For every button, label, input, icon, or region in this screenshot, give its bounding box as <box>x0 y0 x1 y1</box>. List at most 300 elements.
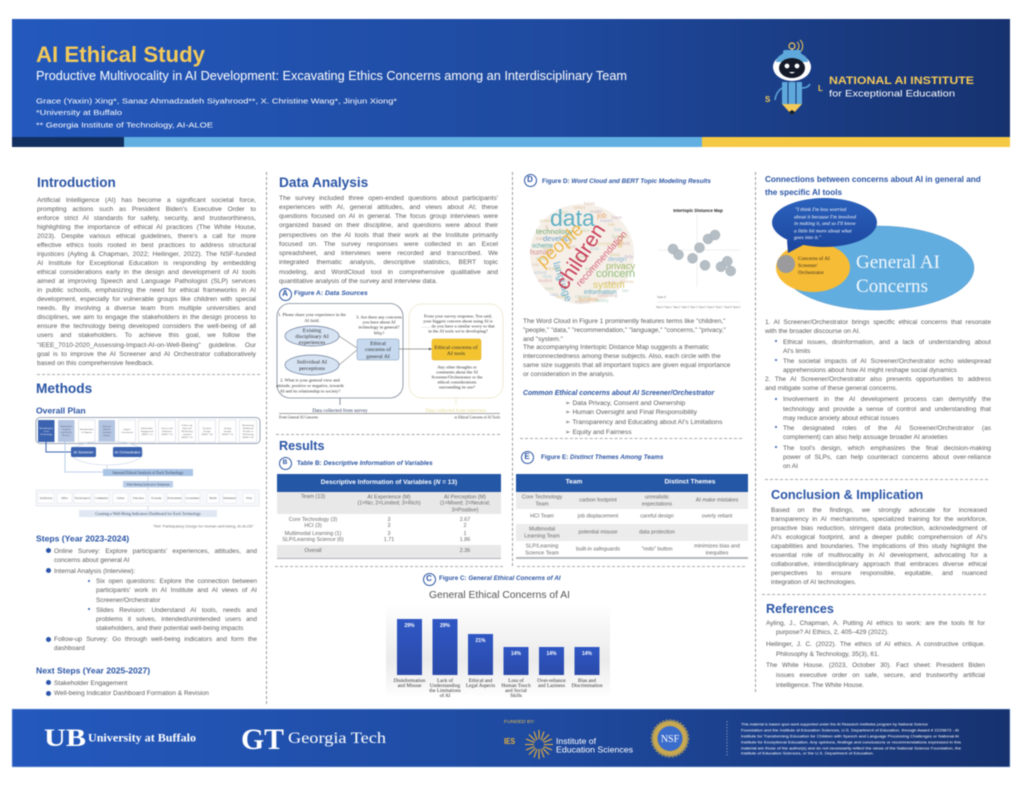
ellipse: disciplinary experiences: Existing <box>303 328 322 334</box>
logo: IES: IES <box>504 737 516 746</box>
well-being domains row: Culture <box>116 497 125 500</box>
diagram: nested concerns ellipses with speech bubble: Orchestrator <box>798 270 824 276</box>
table E: distinct themes: HCI Team <box>530 513 554 519</box>
diagram: figure A data sources: AI and its relationship to society? <box>280 388 340 394</box>
diagram: overall plan flowchart: Analysis <box>62 428 71 431</box>
AI Orchestrator button <box>113 447 142 457</box>
caption: overall plan reference: "Ref: Participatory Design for Human well-being, AI-ALOE" <box>153 524 254 528</box>
list: steps: participants' work in AI Institute and AI views of AI <box>96 587 257 594</box>
chart: intertopic distance map <box>656 208 740 309</box>
chart: word cloud: develop <box>543 234 569 243</box>
text: word cloud explanation <box>522 318 731 378</box>
text: data analysis paragraph: integrated thematic analysis, descriptive statistics, BERT topic <box>279 259 498 266</box>
list: next steps: Stakeholder Engagement <box>54 680 127 686</box>
bar labels <box>394 677 603 699</box>
table B: descriptive information: 1.86 <box>460 537 470 543</box>
logo: University at Buffalo: UB <box>44 725 86 752</box>
text: numbered findings <box>764 318 992 470</box>
ellipse: individual perceptions <box>285 355 339 375</box>
authors and affiliations: Grace (Yaxin) Xing*, Sanaz Ahmadzadeh Siyahrood**, X. Christine Wang*, Jinjun Xiong* <box>36 96 397 106</box>
table E: distinct themes: Team <box>535 501 549 507</box>
text: numbered findings: may reduce anxiety about ethical issues <box>783 415 899 422</box>
list: steps: Screener/Orchestrator <box>96 597 160 604</box>
list: common concerns: ➢ Transparency and Educating about AI's Limitations <box>565 419 722 426</box>
map title: Intertopic Distance Map <box>673 208 723 213</box>
bar values: 14% <box>511 651 522 657</box>
diagram: overall plan flowchart: Well-being <box>242 433 254 436</box>
internal analysis bar <box>103 469 193 476</box>
logo: Georgia Tech: GT <box>241 723 284 756</box>
well-being domains row <box>36 490 259 506</box>
bar labels: Bias and <box>578 678 596 684</box>
pastel background words: law <box>622 288 629 293</box>
box: general concerns: general AI <box>366 354 390 360</box>
table E: distinct themes: minimizes bias and <box>694 543 740 549</box>
diagram: overall plan flowchart: Technology <box>40 433 53 436</box>
diagram: figure A data sources: attitude, positive or negative, towards <box>276 383 344 389</box>
text: introduction paragraph: Artificial Intelligence (AI) has become a significant societal force, <box>37 196 256 204</box>
diagram: overall plan flowchart: Internal <box>103 425 111 428</box>
diagram: overall plan flowchart: Identification <box>80 428 94 431</box>
dashboard bar: Creating a Well-Being Indicators Dashboard for Each Technology <box>95 511 201 516</box>
text: introduction paragraph: disciplines, we aim to engage the stakeholders in the design process to <box>37 314 256 321</box>
diagram: overall plan flowchart: (IEEE 7.4) <box>202 433 213 436</box>
diagram: nested concerns ellipses with speech bubble: Concerns of AI <box>798 255 830 262</box>
text: data analysis paragraph: focused on. The survey responses were collected in an Excel <box>279 241 498 248</box>
diagram: figure A data sources: your biggest concern about using AI is <box>423 318 493 324</box>
text: introduction paragraph: in public schools, emphasizing the need for ethical frameworks in AI <box>37 287 256 294</box>
bar values: 14% <box>582 651 593 657</box>
funding disclaimer: Institute for Exceptional Education. Any opinions, findings and conclusions or recommendations expressed in this <box>741 740 961 744</box>
heading: connections <box>764 175 981 198</box>
heading: connections: Connections between concerns about AI in general and <box>765 175 981 184</box>
logo: IES: Education Sciences <box>556 746 633 754</box>
diagram: nested concerns ellipses with speech bubble: Concerns <box>856 276 928 297</box>
subheading: Overall Plan: Overall Plan <box>36 406 86 416</box>
logo: University at Buffalo: University at Buffalo <box>88 730 196 744</box>
well-being domains row: Psychological <box>75 497 90 500</box>
pastel background words: use <box>570 236 578 241</box>
table E: distinct themes: Multimodal <box>529 526 555 532</box>
list: steps: dashboard <box>54 645 85 652</box>
text: data analysis paragraph: organized based on their discipline, and questions were about their <box>279 222 498 229</box>
text: introduction paragraph: "IEEE_7010-2020_Assessing-Impact-AI-on-Well-Being" guideline. Our <box>37 342 256 348</box>
list: steps: concerns about general AI <box>54 557 130 564</box>
topic circles <box>668 230 736 276</box>
table B: descriptive information: 2 <box>464 523 466 529</box>
list: common concerns: ➢ Human Oversight and Final Responsibility <box>565 409 697 416</box>
pastel background words: think <box>543 274 553 279</box>
pastel background words: equity <box>605 280 617 285</box>
text: numbered findings: apprehensions about how AI might reshape social dynamics <box>783 367 957 374</box>
text: references list <box>766 620 986 690</box>
authors and affiliations <box>36 96 397 130</box>
text: data analysis paragraph: modeling, and WordCloud tool in comprehensive qualitative and <box>279 268 498 276</box>
well-being domains row: Work <box>246 497 253 500</box>
table B: descriptive information: 2.36 <box>460 548 470 554</box>
AI Orchestrator button: AI Orchestrator <box>115 450 141 454</box>
badge A <box>278 288 292 300</box>
pastel background words: teacher <box>548 266 563 271</box>
indicator template bar: Well-Being Indicator Template <box>126 483 170 487</box>
icon: robot pencil mascot: S <box>765 95 771 104</box>
text: references list: Philosophy & Technology, 35(3), 61. <box>776 651 879 658</box>
subheading: Steps: Steps (Year 2023-2024) <box>36 534 129 544</box>
tool concerns ellipse <box>776 243 850 292</box>
diagram: overall plan flowchart: Dashboard <box>243 427 254 430</box>
text: introduction paragraph: enforce strict AI standards for safety, security, and trustworthiness, <box>37 215 256 222</box>
table B label: Table B: Descriptive Information of Variables <box>297 460 433 467</box>
diagram: overall plan flowchart: Survey and <box>161 427 173 430</box>
funded by label: FUNDED BY: <box>504 719 535 724</box>
table B: descriptive information: 3=Positive) <box>452 507 478 513</box>
topic slider <box>656 295 740 309</box>
bar labels: and Misuse <box>398 683 422 689</box>
speech bubble: about it because I'm involved <box>794 214 856 220</box>
diagram: overall plan flowchart: and Needs <box>61 431 71 434</box>
heading: Results: Results <box>279 439 324 453</box>
text: conclusion paragraph: collaborative, interdisciplinary approach that embraces diverse ethical <box>771 561 987 568</box>
box: AI tool concerns: Ethical concerns of <box>434 344 478 351</box>
speech bubble: goes into it." <box>794 235 822 241</box>
diagram: nested concerns ellipses with speech bubble <box>771 197 975 311</box>
well-being domains row: Affect <box>61 497 68 500</box>
table B: descriptive information: 3 <box>388 523 390 529</box>
text: numbered findings: complement) can also help assuage broader AI anxieties <box>783 434 948 441</box>
chart: word cloud: slp <box>617 239 624 248</box>
chart: word cloud: information <box>584 289 617 296</box>
logo text <box>829 75 974 100</box>
text: numbered findings: technology and provide a sense of control and understanding that <box>783 406 991 412</box>
text: introduction paragraph: effective ethics tools rooted in best practices to address structural <box>37 242 256 249</box>
table B: descriptive information: 1 <box>464 531 466 537</box>
diagram: overall plan flowchart: Review <box>62 434 70 437</box>
bar labels: Lack of <box>437 677 453 684</box>
pastel background words: tool <box>560 210 567 215</box>
diagram: overall plan flowchart: Ethical <box>103 428 111 431</box>
chart: word cloud: privacy <box>606 261 636 271</box>
diagram: overall plan flowchart: Indicators <box>162 430 172 433</box>
diagram: figure A data sources: technology in general? <box>359 324 399 330</box>
bar values: 14% <box>546 651 557 657</box>
text: references list: purpose? AI Ethics, 2, 405–429 (2022). <box>776 629 889 636</box>
pastel background words: risk <box>608 222 616 227</box>
pastel background words: ownership <box>598 293 618 298</box>
pastel background words: tools <box>590 246 599 251</box>
logo: Georgia Tech: Georgia Tech <box>288 730 386 747</box>
heading: Introduction: Introduction <box>37 175 116 190</box>
text: numbered findings: 2. The AI Screener/Orchestrator also presents opportunities to address <box>765 376 991 383</box>
pastel background words: help <box>625 254 634 259</box>
logo: IES: Institute of <box>556 737 597 746</box>
diagram: figure A data sources: AI field. <box>304 318 320 323</box>
diagram: overall plan flowchart <box>35 416 261 518</box>
diagram: overall plan flowchart: (IEEE 7.5) <box>222 433 233 436</box>
table B: descriptive information <box>276 473 502 560</box>
ellipse: disciplinary experiences: experiences <box>299 340 325 346</box>
bar labels: Human Touch <box>501 683 531 689</box>
diagram: overall plan flowchart: of Impacts <box>81 431 92 434</box>
diagram: overall plan flowchart: Testing <box>224 427 232 430</box>
text: introduction paragraph: users and stakeholders. To achieve this goal, we follow the <box>37 332 256 339</box>
ellipse: individual perceptions: perceptions <box>299 366 325 372</box>
survey box <box>277 304 403 398</box>
diagram: figure A data sources: 2. What is your general view and <box>280 378 341 382</box>
text: word cloud explanation: same size suggests that all important topics are given equal importance <box>523 362 730 369</box>
pastel background words: ethics <box>574 205 585 210</box>
box: general concerns: Ethical <box>370 341 386 347</box>
chart: word cloud: scheme <box>532 244 554 250</box>
funding disclaimer: This material is based upon work supported under the AI Research Institutes program by National Science <box>741 722 928 726</box>
diagram: overall plan flowchart: Stakeholder <box>60 425 72 428</box>
table E: distinct themes: "redo" button <box>641 547 673 553</box>
list: steps: stakeholders, and their potential well-being impacts <box>96 625 243 632</box>
pastel background words: ai <box>545 224 548 229</box>
diagram: overall plan flowchart: Well-being <box>181 430 193 433</box>
diagram: overall plan flowchart: Follow-up <box>182 424 193 427</box>
well-being domains row: Settlements <box>223 497 236 500</box>
pastel background words: speech <box>616 241 630 246</box>
pastel background words: future <box>584 201 596 206</box>
pastel background words: fair <box>562 218 569 223</box>
text: conclusion paragraph: transparency in AI mechanisms, specialized training for the workforce, <box>771 516 987 523</box>
badge E: E <box>524 452 530 460</box>
bar labels: and Social <box>505 688 527 694</box>
diagram: overall plan flowchart: Identification <box>39 427 54 430</box>
text: conclusion paragraph <box>770 506 988 586</box>
diagram: overall plan flowchart: Design <box>224 430 232 433</box>
pastel background words: issue <box>610 252 621 257</box>
diagram: figure A data sources: Screener/Orchestrator or the <box>432 374 482 380</box>
chart: word cloud: concern <box>596 268 635 280</box>
ellipse: individual perceptions: Individual AI <box>297 360 327 366</box>
pastel background words <box>532 201 634 304</box>
internal analysis bar: Internal Ethical Analysis of Each Technology <box>113 471 183 475</box>
topic slider: Topic 0 Topic 1 Topic 2 Topic 3 Topic 4 Topic 5 Topic 6 Topic 7 Topic 8 Topic 9 <box>656 305 740 309</box>
text: introduction paragraph: development, especially for vulnerable groups like children with special <box>37 296 256 303</box>
text: introduction paragraph: needs. By involving a diverse team from multiple universities and <box>37 305 256 312</box>
text: data analysis paragraph: questions focused on AI in general. The focus group interviews were <box>279 213 498 220</box>
diagram: figure A data sources: comments about the AI <box>436 370 478 374</box>
list: steps: problems it solves, intended/unintended users and <box>96 616 257 623</box>
table E: distinct themes: Team <box>566 479 582 486</box>
text: numbered findings: power of SLPs, can help counteract concerns about over-reliance <box>783 454 991 461</box>
pastel background words: society <box>595 298 609 303</box>
table E: distinct themes: careful design <box>640 513 674 519</box>
diagram: overall plan flowchart: Monitoring <box>242 424 254 427</box>
pastel background words: learn <box>543 246 553 251</box>
table E: distinct themes: Learning Team <box>524 533 560 539</box>
table B: descriptive information: HCI (3) <box>304 523 322 529</box>
text: word cloud explanation: The accompanying Intertopic Distance Map suggests a thematic <box>523 344 709 351</box>
pastel background words: power <box>540 218 552 223</box>
column dividers <box>266 172 267 704</box>
figure C label: Figure C: General Ethical Concerns of AI <box>439 575 561 582</box>
pastel background words: parent <box>575 254 588 259</box>
chart: word cloud: job <box>596 213 606 220</box>
diagram: figure A data sources: Why? <box>374 330 384 336</box>
ellipse: disciplinary experiences <box>285 326 339 346</box>
text: data analysis paragraph: The survey included three open-ended questions about participants' <box>279 194 498 202</box>
table B: descriptive information: Multimodal Learning (1) <box>285 531 341 537</box>
box: AI tool concerns: AI tools <box>447 351 465 357</box>
bar labels: Disinformation <box>394 677 426 684</box>
subtitle: Productive Multivocality in AI Development: Excavating Ethics Concerns among an Interdisciplinary Team <box>36 69 627 83</box>
text: numbered findings: The designated roles of the AI Screener/Orchestrator (as <box>783 425 991 432</box>
list: next steps: Well-being Indicator Dashboard Formation & Revision <box>54 690 209 697</box>
logo: NSF <box>652 720 688 756</box>
list: steps: Slides Revision: Understand AI tools, needs and <box>96 607 257 614</box>
table B: descriptive information: 2.67 <box>460 517 470 523</box>
text: conclusion paragraph: perspectives to ensure responsible, equitable, and nuanced <box>771 570 987 577</box>
diagram: figure A data sources: 3. Are there any concerns <box>356 314 402 320</box>
text: word cloud explanation: or consideration in the analysis. <box>523 371 615 378</box>
text: conclusion paragraph: integration of AI technologies. <box>771 579 856 586</box>
text: numbered findings: AI's limits <box>783 348 810 355</box>
table E: distinct themes: potential misuse <box>579 530 617 536</box>
logo text: for Exceptional Education <box>829 88 955 100</box>
list: common concerns: ➢ Equity and Fairness <box>565 429 632 436</box>
text: numbered findings: 1. AI Screener/Orchestrator brings specific ethical concerns that resonate <box>765 318 991 326</box>
logo text: NATIONAL AI INSTITUTE <box>829 75 974 87</box>
chart: word cloud: recommendation <box>574 229 630 289</box>
pastel background words: labor <box>566 244 576 249</box>
pastel background words: human <box>612 234 626 239</box>
diagram: figure A data sources: in the AI tools we're developing? <box>428 328 488 334</box>
heading: Data Analysis: Data Analysis <box>279 175 368 190</box>
chart: word cloud: technology <box>536 227 573 236</box>
table E: distinct themes: Science Team <box>525 550 559 556</box>
logo: NSF: NSF <box>661 734 680 745</box>
text: conclusion paragraph: Based on the findings, we strongly advocate for increased <box>771 506 987 514</box>
diagram: overall plan flowchart: Iteration <box>203 427 212 430</box>
general concerns ellipse <box>782 226 974 310</box>
table B: descriptive information: 1.71 <box>384 537 394 543</box>
text: word cloud explanation: and "system." <box>523 336 563 343</box>
table B: descriptive information: AI Experience (M) <box>367 495 411 501</box>
diagram: figure A data sources: 1. Please share your experience in the <box>278 312 346 317</box>
diagram: figure A data sources: you have about AI <box>362 320 396 324</box>
speech bubble: a little bit more about what <box>794 228 852 234</box>
bar labels: Understanding <box>430 683 461 689</box>
speech bubble: "I think I'm less worried <box>795 207 847 213</box>
figure E label: Figure E: Distinct Themes Among Teams <box>541 454 663 461</box>
pastel background words: model <box>590 209 602 214</box>
text: data analysis paragraph: experiences with AI, general attitudes, and views about AI; these <box>279 204 498 211</box>
pastel background words: train <box>536 236 545 241</box>
text: introduction paragraph: aimed at improving Speech and Language Pathologist (SLP) services <box>37 278 256 285</box>
diagram: figure A data sources: ethical considerations <box>437 380 477 384</box>
table B: descriptive information: 3 <box>388 517 390 523</box>
heading: References: References <box>766 602 834 616</box>
header banner <box>11 18 1011 148</box>
well-being domains row: Community <box>95 497 109 500</box>
diagram: overall plan flowchart: Stakeholder <box>141 427 153 430</box>
table E: distinct themes: data protection <box>639 530 675 536</box>
heading: connections: the specific AI tools <box>765 188 842 197</box>
text: numbered findings: on AI <box>783 463 798 470</box>
chart: word cloud: system <box>593 280 625 291</box>
pastel background words: consent <box>575 294 591 299</box>
pastel background words: harm <box>612 215 622 220</box>
list: steps: Online Survey: Explore participants' experiences, attitudes, and <box>54 548 257 554</box>
chart: word cloud: human <box>530 250 552 256</box>
table E: distinct themes: overly reliant <box>702 513 732 519</box>
diagram: overall plan flowchart: Report <box>103 434 110 437</box>
table E: distinct themes: expectations <box>642 501 672 507</box>
text: numbered findings: Involvement in the AI development process can demystify the <box>783 396 991 403</box>
chart: word cloud: language <box>550 261 573 303</box>
subheading: Next Steps: Next Steps (Year 2025-2027) <box>36 666 150 676</box>
pastel background words: value <box>618 234 629 239</box>
badge C <box>422 572 436 586</box>
badge B <box>278 457 292 470</box>
text: word cloud explanation: The Word Cloud in Figure 1 prominently features terms like "children," <box>523 318 725 325</box>
dashboard bar <box>79 510 217 517</box>
funding disclaimer: Institute of Education Sciences, or the U.S. Department of Education. <box>741 752 874 756</box>
badge E <box>520 450 534 464</box>
text: numbered findings: The tool's design, which emphasizes the final decision-making <box>783 445 991 452</box>
text: introduction paragraph: goal is to improve the AI Screener and AI Orchestrator collaboratively <box>37 351 256 358</box>
diagram: overall plan flowchart: Data and <box>183 427 192 430</box>
pastel background words: trust <box>545 286 554 291</box>
speech bubble: in making it, and so I'll know <box>794 221 856 227</box>
table B: descriptive information: (1=No; 2=Limited; 3=Rich) <box>357 501 421 507</box>
diagram: figure A data sources: Data collected from survey <box>312 407 368 414</box>
text: numbered findings: and mitigate some of these general concerns. <box>765 385 897 392</box>
text: references list: The White House. (2023, October 30). Fact sheet: President Biden <box>766 662 985 669</box>
figure A label: Figure A: Data Sources <box>294 290 368 297</box>
diagram: overall plan flowchart: Impact <box>124 428 131 431</box>
bar values: 29% <box>404 623 415 629</box>
table B: descriptive information: (1=Mixed; 2=Neutral; <box>440 501 490 507</box>
well-being domains row: Environment <box>167 497 182 500</box>
text: data analysis paragraph: perspectives on the AI tools that their work at the Institute primarily <box>279 232 498 238</box>
text: introduction paragraph: prompting actions such as President Biden's Executive Order to <box>37 206 256 213</box>
chart: general ethical concerns bar chart <box>386 590 610 699</box>
table E: distinct themes: carbon footprint <box>579 498 617 504</box>
AI Screener button: AI Screener <box>73 450 94 454</box>
diagram: figure A data sources: to Ethical Concerns of AI Tools <box>454 416 501 420</box>
authors and affiliations: *University at Buffalo <box>36 108 122 117</box>
chart title: General Ethical Concerns of AI <box>429 590 570 601</box>
table B: descriptive information: Core Technology (3) <box>289 517 337 523</box>
funding disclaimer: Foundation and the Institute of Education Sciences, U.S. Department of Education, through Award # 2229873 - AI <box>741 728 959 732</box>
badge D <box>524 174 536 186</box>
text: references list: intelligence. The White House. <box>776 682 864 689</box>
text: introduction paragraph: highlighting the importance of ethical AI practices (The White House, <box>37 224 256 231</box>
list: steps <box>45 547 258 652</box>
table B: descriptive information: SLP/Learning Science (6) <box>282 537 344 543</box>
funding disclaimer: material are those of the author(s) and do not necessarily reflect the views of the National Science Foundation, the <box>741 746 961 750</box>
badge D: D <box>527 174 533 184</box>
text: data analysis paragraph <box>278 194 498 286</box>
diagram: figure A data sources: …… do you have a similar worry to that <box>421 324 495 328</box>
diagram: overall plan flowchart: Analysis <box>183 433 191 436</box>
funding disclaimer <box>741 722 961 756</box>
text: data analysis paragraph: quantitative analysis of the survey and interview data. <box>279 278 437 285</box>
list: steps: Internal Analysis (Interview): <box>54 568 135 574</box>
icon: robot pencil mascot: L <box>818 84 823 93</box>
pastel background words: process <box>598 241 613 246</box>
text: introduction paragraph: based on this comprehensive feedback. <box>37 360 154 367</box>
bar labels: Loss of <box>508 677 524 684</box>
table E: distinct themes: built-in safeguards <box>576 547 620 553</box>
subheading: common ethical concerns: Common Ethical concerns about AI Screener/Orchestrator <box>523 390 714 397</box>
bar labels: Legal Aspects <box>466 683 495 689</box>
text: introduction paragraph: ethical considerations early in the design and development of AI tools <box>37 269 256 276</box>
box: AI tool concerns <box>432 339 481 360</box>
